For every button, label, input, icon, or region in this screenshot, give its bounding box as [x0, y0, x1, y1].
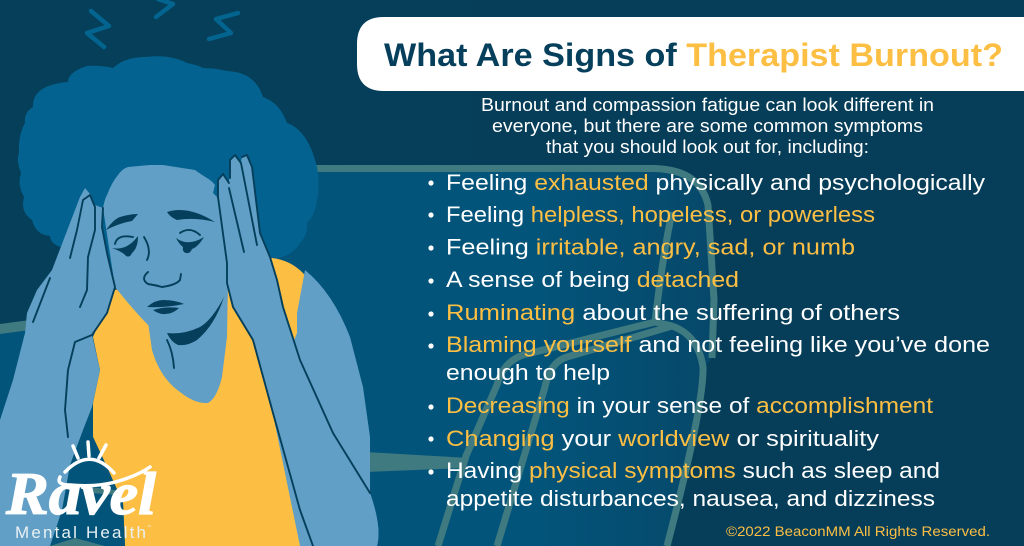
- symptoms list: Feeling helpless, hopeless, or powerless: [446, 202, 875, 227]
- icon: stress zigzags: [87, 0, 238, 47]
- shirt: [93, 258, 325, 546]
- intro text: [481, 95, 934, 157]
- left arm and hand: [0, 188, 115, 546]
- symptoms list: Feeling irritable, angry, sad, or numb: [446, 234, 855, 260]
- right arm and hand: [218, 155, 378, 546]
- symptoms list: A sense of being detached: [446, 267, 739, 292]
- nose: [144, 237, 181, 287]
- right upper arm: [270, 270, 378, 546]
- symptoms list: Blaming yourself and not feeling like you’ve done: [446, 332, 990, 357]
- hair: [18, 56, 318, 300]
- title: What Are Signs of Therapist Burnout?: [384, 37, 1003, 73]
- symptoms list: [428, 170, 990, 511]
- mouth: [147, 300, 184, 307]
- symptoms list: appetite disturbances, nausea, and dizziness: [446, 486, 935, 511]
- face: [103, 165, 229, 333]
- symptoms list: Feeling exhausted physically and psychologically: [446, 170, 985, 195]
- logo sun: [59, 442, 150, 486]
- title banner: [357, 17, 1024, 91]
- symptoms list: Changing your worldview or spirituality: [446, 426, 879, 451]
- symptoms list: Having physical symptoms such as sleep and: [446, 458, 940, 483]
- intro text: Burnout and compassion fatigue can look different in: [481, 95, 934, 115]
- copyright: ©2022 BeaconMM All Rights Reserved.: [726, 523, 990, 539]
- symptoms list: Decreasing in your sense of accomplishment: [446, 393, 933, 418]
- logo: Ravel Mental Health: ™: [147, 524, 151, 529]
- illustration: stressed woman: [0, 56, 378, 546]
- logo: Ravel Mental Health: [5, 442, 156, 542]
- neck shadow: [167, 297, 224, 345]
- logo wordmark: Ravel: [5, 461, 156, 527]
- neck: [148, 280, 228, 403]
- intro text: that you should look out for, including:: [546, 137, 869, 157]
- dark gap between arm and shirt: [50, 407, 125, 546]
- logo subtitle: Mental Health: [15, 523, 146, 542]
- eyes and brows: [106, 214, 138, 230]
- symptoms list: enough to help: [446, 360, 610, 385]
- couch illustration: [0, 168, 716, 546]
- intro text: everyone, but there are some common symptoms: [492, 116, 923, 136]
- symptoms list: Ruminating about the suffering of others: [446, 300, 900, 325]
